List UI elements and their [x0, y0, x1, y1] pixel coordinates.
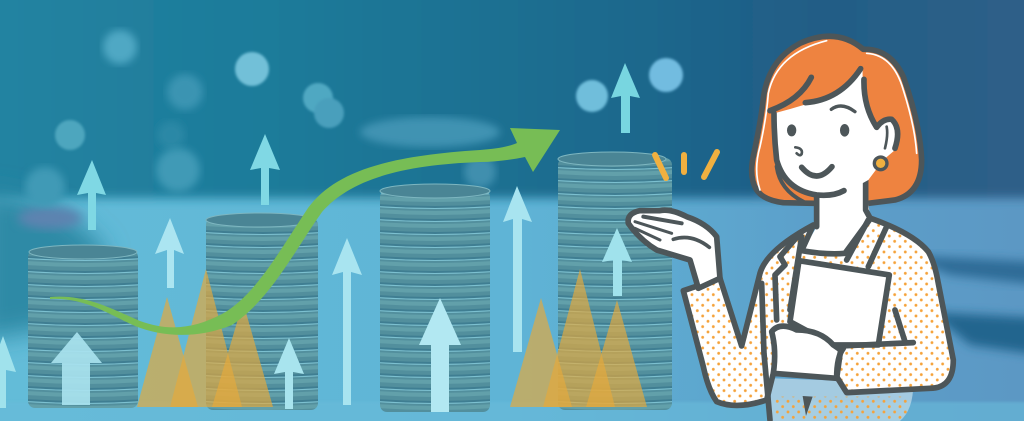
arrow: left edge: [0, 336, 16, 408]
skirt with fading dots: [770, 378, 913, 421]
sparkle lines: [655, 152, 717, 178]
holding hand: [772, 326, 841, 378]
pen: [842, 310, 913, 346]
arrow: upward 7: [602, 228, 632, 296]
arrow: upward 1: [77, 160, 106, 230]
triangles: right cluster: [510, 269, 647, 407]
bokeh lights: [25, 30, 683, 207]
arrow: green growth curve: [50, 128, 560, 335]
skirt slit: [803, 396, 813, 416]
tablet: [790, 261, 889, 345]
skirt dots: [775, 397, 908, 420]
face outline: jaw and brows: [770, 69, 898, 202]
earring: [874, 157, 887, 170]
arrow: upward 10: [274, 338, 304, 409]
centre line: [762, 283, 770, 420]
hair highlight: [757, 41, 917, 190]
arrow: upward 3: [155, 218, 184, 288]
arrow: large coin arrow 9: [51, 332, 102, 405]
character: woman holding tablet: [628, 36, 953, 421]
arrow: upward 6: [611, 63, 640, 133]
coin stack 1: [28, 245, 138, 408]
arrow: upward 5: [503, 186, 532, 352]
coin stack 2: [206, 213, 318, 410]
neck: [802, 177, 870, 257]
arrow: large coin arrow 8: [419, 298, 461, 412]
eyes: [787, 124, 849, 137]
neck lines: [817, 177, 869, 227]
back hair: [752, 36, 922, 203]
triangles: left cluster: [137, 269, 273, 407]
coin stack 4: [558, 152, 672, 410]
arrow: upward 4: [332, 238, 362, 405]
jacket: torso and sleeve: [683, 218, 953, 405]
open hand: [628, 210, 720, 288]
arrow: upward 2: [250, 134, 280, 205]
coin stack 3: [380, 184, 490, 412]
collar: [775, 220, 887, 320]
face: [774, 70, 898, 195]
